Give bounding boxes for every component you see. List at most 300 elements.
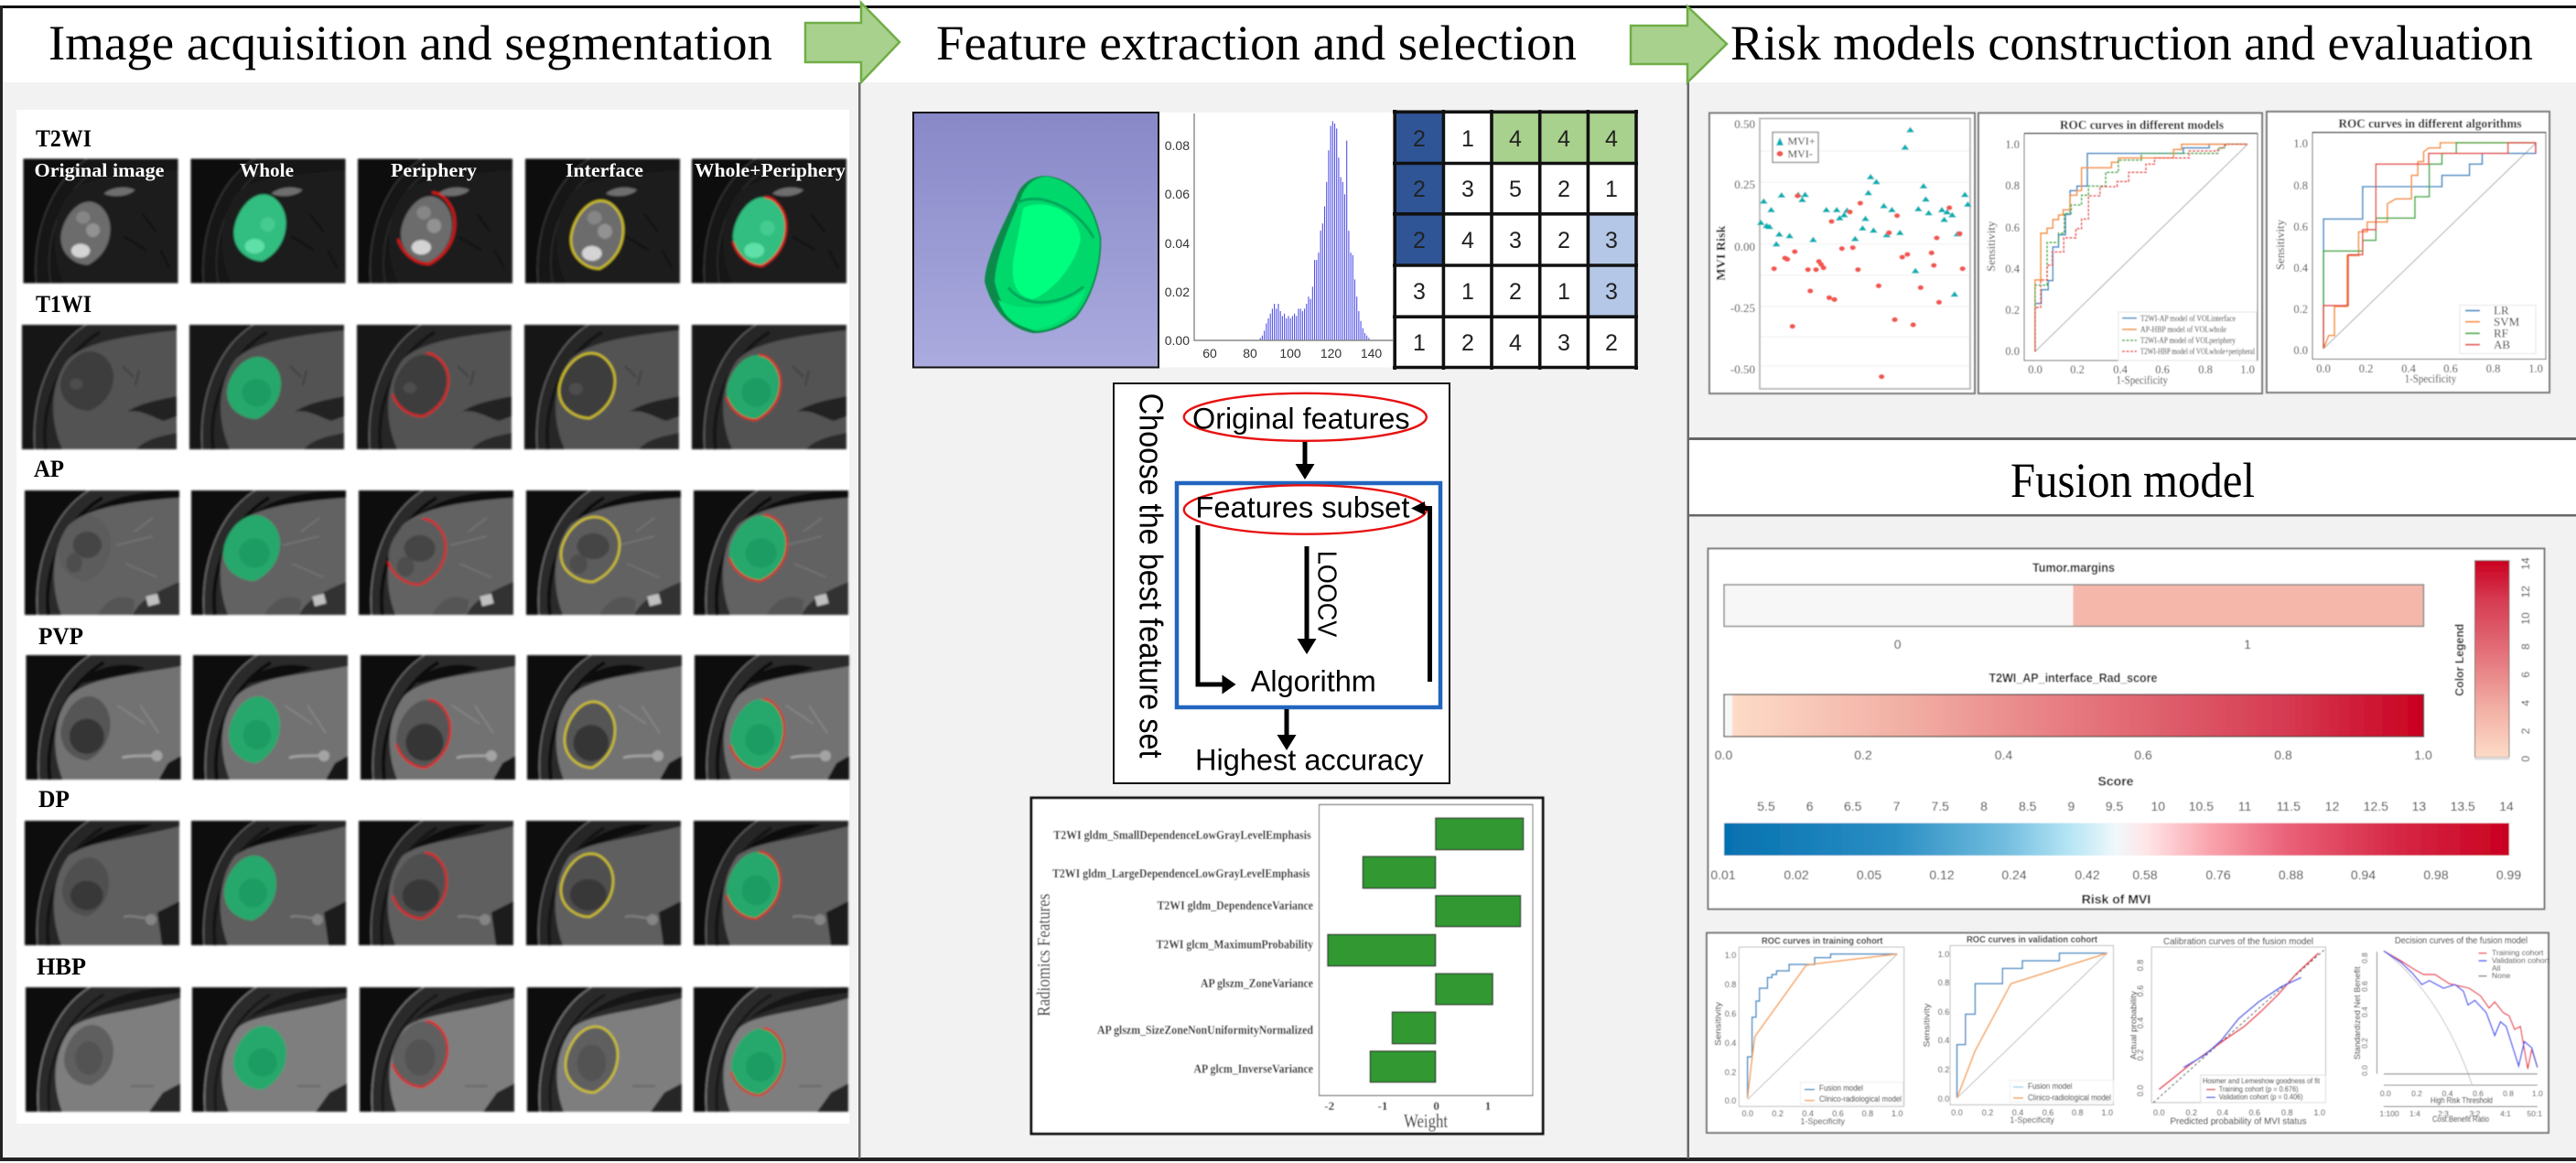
image: T2WI whole plus periphery xyxy=(692,159,846,284)
score scale: 9 xyxy=(2068,799,2075,813)
legend: AB xyxy=(2494,338,2510,351)
axes labels: 0.0 xyxy=(2028,363,2042,376)
tumor margin scale: 0 xyxy=(1894,637,1902,651)
score scale: 13.5 xyxy=(2451,799,2475,813)
chart: decision curves: Training cohort xyxy=(2492,948,2544,957)
table: gray-level matrix: 3 xyxy=(1461,177,1474,202)
chart: calibration: 0.6 xyxy=(2249,1108,2260,1117)
chart: ROC validation: 0.8 xyxy=(2072,1108,2084,1117)
table: gray-level matrix: 3 xyxy=(1509,228,1522,253)
image: T1WI interface xyxy=(524,325,679,449)
image: HBP original xyxy=(26,987,180,1112)
chart: ROC validation: 0.6 xyxy=(1938,1007,1949,1017)
bars xyxy=(1328,818,1524,1082)
table: gray-level matrix: 5 xyxy=(1509,177,1522,202)
title: risk models: Risk models construction and evaluation xyxy=(1730,16,2533,70)
label: risk of MVI: Risk of MVI xyxy=(2082,891,2150,906)
column headers: Original image xyxy=(35,159,165,181)
table: gray-level matrix xyxy=(1393,110,1638,370)
feature labels xyxy=(1052,828,1313,1076)
weight axis: -2 xyxy=(1324,1099,1334,1113)
risk scale: 0.05 xyxy=(1857,867,1881,882)
tumor margin scale xyxy=(1894,637,2251,651)
image: T1WI whole xyxy=(189,325,344,449)
axes labels: 0.2 xyxy=(2070,363,2085,376)
label: HBP: HBP xyxy=(37,953,86,980)
chart: calibration: 0.4 xyxy=(2136,1018,2145,1028)
loop box xyxy=(1177,483,1440,707)
chart: decision curves: Decision curves of the fusion model xyxy=(2395,935,2527,946)
legend xyxy=(2118,312,2257,361)
chart: ROC training xyxy=(1713,935,1904,1125)
scatter y axis: 0.50 xyxy=(1734,117,1755,131)
axes labels: 0.8 xyxy=(2005,179,2020,192)
image: T1WI original xyxy=(22,325,177,449)
row: PVP xyxy=(26,623,849,780)
rad score scale: 0.4 xyxy=(1995,748,2012,762)
color legend: 14 xyxy=(2519,557,2532,570)
chart: ROC validation: 0.6 xyxy=(2042,1108,2053,1117)
chart: decision curves: 1:4 xyxy=(2409,1109,2420,1118)
axes labels: 0.0 xyxy=(2293,344,2308,357)
chart: intensity histogram: 0.06 xyxy=(1165,187,1190,201)
chart: ROC validation: ROC curves in validation cohort xyxy=(1967,934,2097,945)
node: algorithm: Algorithm xyxy=(1251,664,1376,697)
arrow: to highest accuracy xyxy=(1277,709,1296,750)
table: gray-level matrix: 1 xyxy=(1461,126,1474,152)
chart: intensity histogram: 140 xyxy=(1361,346,1382,361)
image: HBP periphery xyxy=(360,987,514,1112)
chart: MVI risk scatter xyxy=(1709,113,1975,393)
legend: RF xyxy=(2494,327,2508,340)
risk scale: 0.58 xyxy=(2132,867,2158,882)
column headers: Interface xyxy=(566,159,643,181)
chart: ROC training: 0.8 xyxy=(1725,980,1736,989)
chart: intensity histogram: 80 xyxy=(1243,346,1257,361)
image: AP whole plus periphery xyxy=(694,490,848,615)
label: PVP: PVP xyxy=(38,623,83,650)
panel: MR image grid xyxy=(16,110,849,1124)
chart: ROC validation: Clinico-radiological model xyxy=(2028,1093,2111,1102)
chart: calibration: Calibration curves of the fusion model xyxy=(2163,936,2313,947)
axes labels: 0.4 xyxy=(2401,362,2417,375)
table: gray-level matrix: 2 xyxy=(1413,228,1426,253)
chart: intensity histogram: 120 xyxy=(1320,346,1342,361)
feature labels: T2WI gldm_SmallDependenceLowGrayLevelEmphasis xyxy=(1053,828,1311,842)
chart: decision curves: 4:1 xyxy=(2500,1109,2511,1118)
chart: ROC validation: 0.2 xyxy=(1982,1108,1993,1117)
feature labels: AP glszm_SizeZoneNonUniformityNormalized xyxy=(1097,1023,1313,1037)
score scale: 12.5 xyxy=(2364,799,2388,813)
chart: calibration: Predicted probability of MVI status xyxy=(2171,1116,2306,1127)
chart: ROC validation: 0.0 xyxy=(1938,1094,1949,1104)
legend: SVM xyxy=(2494,315,2520,328)
table: gray-level matrix: 2 xyxy=(1413,177,1426,202)
chart: intensity histogram: 100 xyxy=(1279,346,1301,361)
panel: risk model charts xyxy=(1709,112,2549,393)
column headers: Whole+Periphery xyxy=(695,159,846,181)
chart: calibration: Hosmer and Lemeshow goodness of fit xyxy=(2203,1076,2321,1085)
scatter legend xyxy=(1773,132,1818,163)
title: feature extraction: Feature extraction and selection xyxy=(936,16,1577,70)
score scale: 7 xyxy=(1893,799,1901,813)
score scale: 11 xyxy=(2238,799,2251,813)
image: PVP interface xyxy=(527,655,682,780)
chart: ROC training: 0.8 xyxy=(1862,1109,1873,1118)
arrow: step 1 to 2 xyxy=(805,3,900,82)
table: gray-level matrix: 1 xyxy=(1557,279,1570,305)
node: features subset xyxy=(1184,485,1427,534)
label: tumor margins: Tumor.margins xyxy=(2032,560,2115,575)
scatter y axis: 0.25 xyxy=(1734,178,1755,191)
image: AP whole xyxy=(191,490,346,615)
chart: radiomics feature weights xyxy=(1031,798,1543,1134)
score scale xyxy=(1757,799,2514,813)
weight axis: 0 xyxy=(1433,1099,1439,1113)
table: gray-level matrix: 2 xyxy=(1413,126,1426,152)
color legend: 8 xyxy=(2519,643,2532,650)
image: PVP whole plus periphery xyxy=(695,655,849,780)
score scale: 6 xyxy=(1806,799,1814,813)
chart: decision curves: 0.4 xyxy=(2442,1089,2453,1098)
score scale: 8.5 xyxy=(2019,799,2037,813)
image: HBP interface xyxy=(527,987,682,1112)
risk scale: 0.76 xyxy=(2205,867,2231,882)
chart: decision curves: Cost:Benefit Ratio xyxy=(2432,1115,2489,1124)
chart: decision curves: 0.0 xyxy=(2380,1089,2391,1098)
axes labels: 0.2 xyxy=(2359,362,2373,375)
risk scale xyxy=(1710,867,2521,882)
table: gray-level matrix: 4 xyxy=(1461,228,1474,253)
rad score scale: 0.8 xyxy=(2274,748,2292,762)
axes labels xyxy=(2273,137,2543,385)
chart: ROC training: 1.0 xyxy=(1725,951,1736,960)
axes labels: 1-Specificity xyxy=(2116,373,2169,386)
axes labels: 1.0 xyxy=(2528,362,2543,375)
chart: calibration xyxy=(2129,936,2326,1127)
chart: ROC validation: 1-Specificity xyxy=(2010,1115,2054,1125)
label: score: Score xyxy=(2098,774,2134,789)
row: T2WI xyxy=(24,125,846,284)
chart: ROC training: 0.6 xyxy=(1832,1109,1844,1118)
chart: calibration: Actual probability xyxy=(2129,991,2139,1060)
chart: ROC training: 0.0 xyxy=(1741,1109,1753,1118)
chart: decision curves: Standardized Net Benefit xyxy=(2353,966,2363,1060)
chart: calibration: 0.2 xyxy=(2136,1050,2145,1061)
node: original features xyxy=(1184,393,1427,441)
color legend: 0 xyxy=(2519,756,2532,762)
arrow: subset to algorithm left branch xyxy=(1195,525,1235,694)
rad score scale: 0.6 xyxy=(2134,748,2152,762)
chart: calibration: 0.0 xyxy=(2153,1108,2165,1117)
chart: ROC validation: 0.4 xyxy=(1938,1036,1949,1045)
legend xyxy=(2460,304,2536,353)
axes labels: 0.0 xyxy=(2316,362,2331,375)
scatter legend: MVI+ xyxy=(1788,135,1816,147)
color legend: 6 xyxy=(2519,672,2532,678)
risk scale: 0.98 xyxy=(2423,867,2449,882)
MVI+ markers xyxy=(1757,127,1972,296)
weight axis: 1 xyxy=(1485,1099,1491,1113)
color legend xyxy=(2452,557,2532,762)
chart: decision curves: 0.4 xyxy=(2360,1007,2369,1018)
color legend: 12 xyxy=(2519,586,2532,598)
arrow: LOOCV xyxy=(1298,546,1316,654)
bar: tumor margins xyxy=(1724,585,2423,626)
rad score scale: 1.0 xyxy=(2414,748,2432,762)
node: original features: Original features xyxy=(1192,403,1410,436)
chart: ROC training: 0.2 xyxy=(1772,1109,1784,1118)
bar: rad score xyxy=(1724,695,2423,737)
table: gray-level matrix: 1 xyxy=(1413,330,1426,356)
axes labels: 0.8 xyxy=(2486,362,2500,375)
risk scale: 0.99 xyxy=(2496,867,2521,882)
score scale: 10.5 xyxy=(2189,799,2214,813)
table: gray-level matrix: 4 xyxy=(1509,330,1522,356)
tumor margin scale: 1 xyxy=(2244,637,2251,651)
label: AP: AP xyxy=(34,456,64,482)
color legend: 4 xyxy=(2519,700,2532,706)
chart: intensity histogram: 0.02 xyxy=(1165,285,1190,299)
color legend: 10 xyxy=(2519,612,2532,625)
bar: risk of MVI xyxy=(1724,824,2509,856)
axes labels: 0.4 xyxy=(2113,363,2129,376)
axes labels: 1.0 xyxy=(2293,137,2308,150)
chart: calibration: 0.6 xyxy=(2136,985,2145,996)
label: LOOCV: LOOCV xyxy=(1312,551,1342,638)
chart: ROC training: 0.2 xyxy=(1725,1068,1736,1077)
score scale: 9.5 xyxy=(2106,799,2123,813)
feature labels: AP glcm_InverseVariance xyxy=(1193,1061,1313,1076)
curves xyxy=(2035,145,2247,351)
table: gray-level matrix: 3 xyxy=(1605,279,1618,305)
chart: ROC validation: 0.4 xyxy=(2012,1108,2023,1117)
legend: T2WI-HBP model of VOLwhole+peripheral xyxy=(2140,347,2255,357)
chart: decision curves: 2:3 xyxy=(2438,1109,2449,1118)
image: AP interface xyxy=(526,490,681,615)
row: AP xyxy=(25,456,848,615)
table: gray-level matrix: 4 xyxy=(1605,126,1618,152)
chart: ROC validation: 0.8 xyxy=(1938,978,1949,987)
chart: calibration: 0.8 xyxy=(2281,1108,2292,1117)
arrow: step 2 to 3 xyxy=(1631,6,1727,82)
chart: ROC training: Clinico-radiological model xyxy=(1819,1094,1902,1104)
table: gray-level matrix: 1 xyxy=(1605,177,1618,202)
chart: calibration: 1.0 xyxy=(2313,1108,2325,1117)
column headers xyxy=(35,159,846,181)
scatter y axis: 0.00 xyxy=(1734,240,1755,253)
label: T1WI: T1WI xyxy=(36,291,92,318)
chart: ROC training: ROC curves in training cohort xyxy=(1762,935,1883,946)
image: DP periphery xyxy=(359,821,513,945)
chart: ROC validation: 1.0 xyxy=(2101,1108,2113,1117)
chart: decision curves: None xyxy=(2492,971,2511,980)
chart: ROC training: 0.4 xyxy=(1725,1039,1736,1048)
rad score scale: 0.2 xyxy=(1854,748,1872,762)
image: T2WI periphery xyxy=(358,159,512,284)
chart: calibration: Validation cohort (p = 0.406) xyxy=(2219,1093,2303,1102)
image: T2WI whole xyxy=(190,159,346,284)
table: gray-level matrix: 4 xyxy=(1509,126,1522,152)
image: DP interface xyxy=(526,821,681,945)
risk scale: 0.88 xyxy=(2279,867,2303,882)
node: features subset: Features subset xyxy=(1195,490,1410,523)
chart: calibration: 0.8 xyxy=(2136,960,2145,971)
chart: intensity histogram: 0.08 xyxy=(1165,138,1190,153)
score scale: 6.5 xyxy=(1844,799,1862,813)
feature labels: AP glszm_ZoneVariance xyxy=(1201,976,1313,990)
table: gray-level matrix: 4 xyxy=(1557,126,1570,152)
axes labels: 0.4 xyxy=(2293,262,2309,275)
panel: fusion model performance xyxy=(1707,933,2549,1133)
axes labels: 0.2 xyxy=(2005,304,2020,317)
chart: decision curves: 0.8 xyxy=(2360,953,2369,964)
axes labels: 0.6 xyxy=(2443,362,2458,375)
chart: ROC validation: 1.0 xyxy=(1938,950,1949,959)
chart: ROC in different algorithms xyxy=(2267,112,2549,393)
flowchart: feature selection xyxy=(1114,383,1450,783)
image: PVP original xyxy=(26,655,181,780)
chart: ROC validation: 0.2 xyxy=(1938,1065,1949,1074)
label: DP: DP xyxy=(38,786,70,813)
chart: ROC validation xyxy=(1923,934,2114,1125)
score scale: 8 xyxy=(1980,799,1988,813)
chart: calibration: 0.4 xyxy=(2217,1108,2228,1117)
chart: decision curves xyxy=(2353,935,2549,1124)
weight axis: -1 xyxy=(1378,1099,1387,1113)
image: PVP whole xyxy=(193,655,348,780)
image: DP original xyxy=(25,821,179,945)
panel: feature extraction graphics xyxy=(913,110,1638,1134)
chart: decision curves: 50:1 xyxy=(2527,1109,2542,1118)
chart: ROC training: 0.0 xyxy=(1725,1096,1736,1105)
score scale: 14 xyxy=(2499,799,2514,813)
legend: AP-HBP model of VOLwhole xyxy=(2140,325,2226,335)
chart: decision curves: 1:100 xyxy=(2379,1109,2399,1118)
image: DP whole xyxy=(191,821,346,945)
title: ROC curves in different models xyxy=(2060,118,2224,132)
chart: ROC validation: Fusion model xyxy=(2028,1082,2072,1091)
chart: decision curves: High Risk Threshold xyxy=(2430,1096,2493,1105)
curves xyxy=(2323,143,2536,349)
title: ROC curves in different algorithms xyxy=(2339,117,2522,130)
risk scale: 0.94 xyxy=(2351,867,2376,882)
arrow: original to subset xyxy=(1296,442,1314,479)
rad score scale: 0.0 xyxy=(1715,748,1732,762)
chart: decision curves: 3:2 xyxy=(2469,1109,2481,1118)
title: fusion model: Fusion model xyxy=(2010,453,2255,508)
image: AP original xyxy=(25,490,179,615)
column headers: Whole xyxy=(240,159,294,181)
label: choose the best feature set: Choose the best feature set xyxy=(1133,393,1169,759)
color legend: Color Legend xyxy=(2452,624,2466,696)
weight axis xyxy=(1324,1099,1491,1113)
axes labels: 0.0 xyxy=(2005,345,2020,358)
feature labels: T2WI glcm_MaximumProbability xyxy=(1157,937,1313,952)
chart: ROC training: Fusion model xyxy=(1819,1083,1863,1093)
table: gray-level matrix: 2 xyxy=(1509,279,1522,305)
panel: nomogram xyxy=(1708,549,2544,910)
scatter y axis: -0.50 xyxy=(1730,362,1755,376)
table: gray-level matrix: 2 xyxy=(1461,330,1474,356)
chart: intensity histogram: 60 xyxy=(1202,346,1217,361)
label: radiomics features: Radiomics Features xyxy=(1034,894,1054,1017)
image: HBP whole plus periphery xyxy=(694,987,848,1112)
row: HBP xyxy=(26,953,848,1112)
chart: ROC in different models xyxy=(1978,113,2262,393)
score scale: 12 xyxy=(2325,799,2340,813)
chart: intensity histogram: 0.04 xyxy=(1165,236,1190,251)
chart: decision curves: 0.0 xyxy=(2360,1065,2369,1076)
chart: intensity histogram xyxy=(1159,113,1394,368)
score scale: 10 xyxy=(2151,799,2165,813)
axes labels: 1-Specificity xyxy=(2405,372,2457,385)
table: gray-level matrix: 2 xyxy=(1557,177,1570,202)
legend: T2WI-AP model of VOLinterface xyxy=(2140,314,2236,324)
chart: ROC training: Sensitivity xyxy=(1713,1002,1724,1046)
table: gray-level matrix: 3 xyxy=(1413,279,1426,305)
axes labels: Sensitivity xyxy=(2273,220,2287,270)
chart: decision curves: 0.2 xyxy=(2360,1038,2369,1049)
table: gray-level matrix: 1 xyxy=(1461,279,1474,305)
chart: decision curves: 0.6 xyxy=(2360,981,2369,992)
feature labels: T2WI gldm_LargeDependenceLowGrayLevelEmphasis xyxy=(1052,867,1310,880)
chart: intensity histogram: 0.00 xyxy=(1165,333,1190,348)
table: gray-level matrix: 2 xyxy=(1557,228,1570,253)
label: MVI risk: MVI Risk xyxy=(1715,225,1729,281)
chart: ROC training: 0.4 xyxy=(1802,1109,1814,1118)
axes labels xyxy=(1984,138,2255,386)
chart: calibration: 0.2 xyxy=(2185,1108,2197,1117)
score scale: 5.5 xyxy=(1757,799,1775,813)
chart: decision curves: 0.6 xyxy=(2473,1089,2484,1098)
node: highest accuracy: Highest accuracy xyxy=(1195,743,1424,776)
label: T2WI: T2WI xyxy=(36,125,92,152)
column headers: Periphery xyxy=(391,159,478,181)
chart: calibration: 0.0 xyxy=(2136,1085,2145,1096)
image: 3D tumour render xyxy=(913,113,1159,368)
chart: ROC training: 1.0 xyxy=(1892,1109,1902,1118)
score scale: 13 xyxy=(2412,799,2426,813)
score scale: 7.5 xyxy=(1931,799,1949,813)
legend: LR xyxy=(2494,304,2509,317)
scatter legend: MVI- xyxy=(1788,147,1813,160)
score scale: 11.5 xyxy=(2277,799,2301,813)
title: image acquisition: Image acquisition and segmentation xyxy=(49,16,772,70)
table: gray-level matrix: 3 xyxy=(1605,228,1618,253)
image: T2WI interface xyxy=(525,159,680,284)
chart: ROC validation: Sensitivity xyxy=(1923,1003,1933,1047)
chart: ROC validation: 0.0 xyxy=(1951,1108,1963,1117)
risk scale: 0.42 xyxy=(2075,867,2100,882)
risk scale: 0.01 xyxy=(1710,867,1736,882)
image: HBP whole xyxy=(192,987,347,1112)
image: T1WI periphery xyxy=(357,325,512,449)
axes labels: 0.8 xyxy=(2293,179,2308,192)
chart: ROC training: 0.6 xyxy=(1725,1009,1736,1018)
risk scale: 0.24 xyxy=(2001,867,2027,882)
axes labels: 1.0 xyxy=(2240,363,2255,376)
risk scale: 0.02 xyxy=(1784,867,1809,882)
row: T1WI xyxy=(22,291,846,449)
risk scale: 0.12 xyxy=(1929,867,1955,882)
chart: decision curves: 1.0 xyxy=(2532,1089,2543,1098)
image: DP whole plus periphery xyxy=(694,821,848,945)
chart: ROC training: 1-Specificity xyxy=(1800,1116,1845,1125)
arrow: algorithm back to subset xyxy=(1411,501,1432,682)
axes labels: 0.6 xyxy=(2155,363,2170,376)
MVI- markers xyxy=(1772,193,1966,379)
